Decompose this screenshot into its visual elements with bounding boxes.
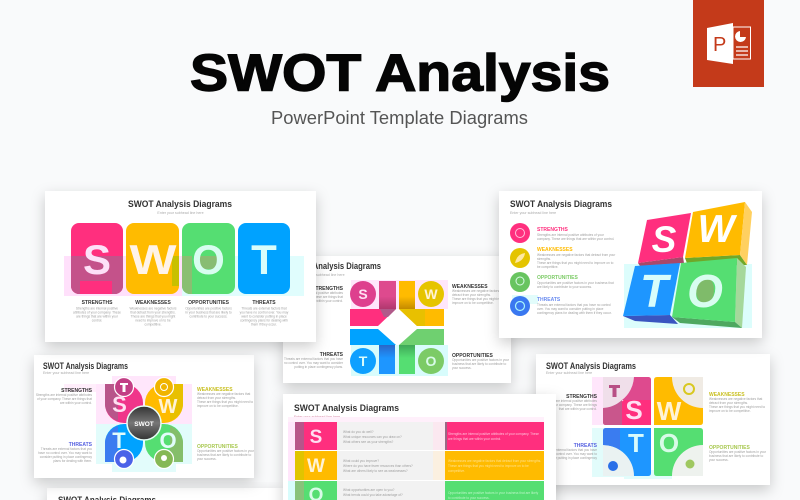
list item: strengths [510, 223, 614, 243]
slide: petal diagram: Enter your subhead line here [43, 371, 89, 375]
labels: left and right text: These are things that you might need to [197, 400, 253, 404]
row: opportunities [295, 481, 544, 500]
slide: corner tiles diagram: Enter your subhead line here [546, 371, 592, 375]
slide: partially visible bottom-left slide [47, 488, 283, 500]
list item: threats [510, 295, 612, 316]
labels: left and right text: improve on to be competitive. [197, 404, 239, 408]
block: O: O [192, 236, 225, 283]
labels: text blocks: no control over. You may want to [551, 452, 597, 456]
labels: left and right text: Strengths are internal positive attributes [36, 393, 92, 397]
list item: opportunities: Opportunities are positive factors in your business that [537, 281, 614, 285]
labels: text blocks: OPPORTUNITIES [709, 445, 751, 451]
column captions: that detract from your strengths. [130, 310, 176, 314]
slide: centered cross diagram: subhead line here [316, 273, 345, 277]
list item: weaknesses: strengths. [537, 257, 551, 261]
row: weaknesses: Where do you have fewer resources than others? [343, 464, 413, 468]
row: weaknesses: These are things that you might need to improve on to be [448, 464, 529, 468]
block: T [238, 223, 290, 294]
diagram: threats arm [350, 329, 396, 374]
row: weaknesses: What are others likely to see as weaknesses? [343, 469, 408, 473]
slide: table diagram: SWOT Analysis Diagrams [294, 403, 399, 413]
labels: left and right text: Threats are external factors that you [41, 447, 92, 451]
tile: threats [603, 428, 651, 476]
labels: text blocks: These are things that [313, 295, 343, 299]
block: T: T [251, 236, 277, 283]
labels: text blocks: no control over. You may want to consider [284, 361, 344, 365]
main title: SWOT Analysis [190, 44, 610, 102]
petal: threats [105, 424, 143, 468]
labels: left and right text [36, 384, 255, 463]
column captions: you have no control over. You may [240, 310, 289, 314]
diagram: opportunities arm: O [426, 353, 437, 369]
labels: text blocks: Strengths are internal positive attributes [541, 399, 597, 403]
column captions: contribute to your success. [190, 314, 228, 318]
column captions: control. [92, 318, 102, 322]
labels: left and right text: are within your control. [60, 401, 92, 405]
labels: text blocks: your success. [452, 366, 472, 370]
list item: strengths: company. These are things that are within your control. [537, 237, 614, 241]
labels: text blocks: Opportunities are positive factors in your [452, 358, 510, 362]
block: W: W [130, 236, 177, 283]
labels: left and right text: consider putting in place contingency [40, 455, 92, 459]
labels: left and right text: OPPORTUNITIES [197, 444, 239, 450]
row: strengths: Strengths are internal positive attributes of your company. These [448, 432, 539, 436]
block: O [182, 223, 235, 294]
labels: text blocks: These are things that you might need to [452, 297, 508, 301]
labels: text blocks: consider putting in place contingency [545, 456, 597, 460]
diagram: weaknesses arm [399, 281, 444, 326]
icon: PowerPoint badge [693, 0, 764, 87]
slide: 3D cube diagram: Enter your subhead line here [510, 211, 556, 215]
row: weaknesses: W [307, 456, 325, 477]
petal: weaknesses: W [159, 396, 178, 418]
row: strengths [295, 422, 544, 450]
column captions: attributes of your company. These [73, 310, 121, 314]
list item: weaknesses: Weaknesses are negative factors that detract from your [537, 253, 616, 257]
row: strengths: What unique resources can you draw on? [343, 435, 402, 439]
labels: left and right text: business that are likely to contribute to [197, 453, 251, 457]
list item: weaknesses: be competitive. [537, 265, 559, 269]
row: weaknesses: competitive. [448, 469, 465, 473]
labels: left and right text: of your company. These are things that [37, 397, 92, 401]
list item: weaknesses: These are things that you might need to improve on to [537, 261, 614, 265]
block: W [126, 223, 179, 294]
tile: threats: T [628, 428, 644, 458]
petal: strengths [105, 378, 143, 423]
block: S [71, 223, 123, 294]
labels: text blocks: WEAKNESSES [452, 284, 488, 290]
labels: text blocks: putting in place contingency plans. [294, 365, 343, 369]
labels: left and right text: have no control over. You may want to [38, 451, 92, 455]
labels: text blocks: OPPORTUNITIES [452, 353, 494, 359]
slide: table diagram: Enter your subhead line here [294, 415, 340, 419]
slide: centered cross diagram: SWOT Analysis Diagrams [288, 261, 381, 271]
list item: threats: contingency plans for dealing with them if they occur. [537, 311, 612, 315]
labels: left and right text: your success. [197, 457, 217, 461]
row: opportunities: What trends could you take advantage of? [343, 493, 403, 497]
center badge [127, 406, 161, 440]
row: weaknesses: Weaknesses are negative factors that detract from your strengths. [448, 459, 541, 463]
labels: text blocks: These are things that you might need to [709, 405, 765, 409]
slide: petal diagram [34, 355, 255, 478]
subtitle: PowerPoint Template Diagrams [271, 108, 528, 128]
column captions: them if they occur. [251, 322, 277, 326]
column captions: competitive. [144, 322, 162, 326]
row: strengths: What others see as your strengths? [343, 440, 394, 444]
labels: text blocks: internal positive attributes [307, 291, 343, 295]
labels: text blocks: Weaknesses are negative factors that [709, 397, 762, 401]
slide: 3D cube diagram [499, 191, 762, 338]
labels: text blocks: improve on to be competitive. [709, 409, 751, 413]
slide: corner tiles diagram: SWOT Analysis Diagrams [546, 361, 636, 371]
3D cubes: T [640, 265, 672, 317]
tile: opportunities: O [659, 428, 679, 458]
column captions: want to consider putting in place [241, 314, 287, 318]
row: strengths: are things that are within your control. [448, 437, 501, 441]
column captions: contingency plans for dealing with [240, 318, 288, 322]
labels: text blocks: of your company. These are things [548, 403, 597, 407]
row: opportunities: What opportunities are open to you? [343, 488, 395, 492]
list item: weaknesses [510, 247, 616, 269]
tile: weaknesses: W [657, 396, 682, 426]
3D cubes: S [652, 219, 677, 260]
labels: text blocks [538, 392, 767, 462]
labels: text blocks: business that are likely to contribute to [709, 454, 763, 458]
list item: opportunities: are likely to contribute to your success. [537, 285, 592, 289]
list item: strengths: Strengths are internal positive attributes of your [537, 233, 605, 237]
column captions: need to improve on to be [135, 318, 171, 322]
column captions: Weaknesses are negative factors [129, 306, 177, 310]
list item: opportunities [510, 272, 614, 292]
slide: table diagram [283, 394, 556, 500]
column captions: Opportunities are positive factors [185, 306, 232, 310]
labels: text blocks: business that are likely to contribute to [452, 362, 506, 366]
labels: left and right text: STRENGTHS [61, 388, 93, 394]
labels: left and right text: detract from your strengths. [197, 396, 236, 400]
diagram: threats arm: T [359, 353, 368, 369]
labels: left and right text: WEAKNESSES [197, 387, 233, 393]
row: weaknesses [295, 451, 544, 480]
labels: text blocks: detract from your strengths. [709, 401, 748, 405]
row: opportunities: Opportunities are positive factors in your business that are likely [448, 491, 539, 495]
labels: text blocks: detract from your strengths. [452, 293, 491, 297]
slide: petal diagram: SWOT Analysis Diagrams [43, 361, 128, 371]
labels: left and right text: THREATS [69, 442, 93, 448]
slide: SWOT letter blocks: Enter your subhead line here [157, 211, 204, 215]
3D cubes: O [687, 265, 723, 317]
list item: threats: over. You may want to consider putting in place [537, 307, 604, 311]
column captions [73, 300, 289, 326]
labels: left and right text: Opportunities are positive factors in your [197, 449, 255, 453]
column captions: in your business that are likely to [185, 310, 232, 314]
list item: opportunities: OPPORTUNITIES [537, 275, 579, 281]
3D cubes: W [698, 208, 738, 251]
slide: SWOT letter blocks: SWOT Analysis Diagrams [128, 199, 232, 209]
labels: text blocks: STRENGTHS [312, 286, 344, 292]
diagram: weaknesses arm: W [424, 286, 438, 302]
block: S: S [83, 236, 111, 283]
labels: text blocks: that are within your control. [559, 407, 597, 411]
row: strengths: What do you do well? [343, 430, 374, 434]
labels: text blocks: Opportunities are positive factors in your [709, 450, 767, 454]
list item: threats: THREATS [537, 297, 561, 303]
slide: centered cross diagram [283, 256, 511, 383]
tile: strengths: S [625, 395, 643, 425]
center badge: SWOT [134, 421, 154, 428]
labels: text blocks: are within your control. [311, 299, 343, 303]
tile: weaknesses [654, 377, 703, 426]
3D cubes [623, 202, 752, 328]
labels: text blocks [284, 284, 510, 370]
column captions: WEAKNESSES [135, 300, 171, 306]
row: strengths: S [310, 427, 322, 448]
tile: opportunities [654, 428, 703, 476]
diagram: strengths arm: S [358, 286, 368, 302]
petal: strengths: S [112, 392, 127, 417]
diagram: opportunities arm [399, 329, 444, 374]
labels: text blocks: THREATS [320, 352, 344, 358]
diagram: strengths arm [350, 281, 396, 326]
petal: weaknesses [145, 378, 183, 423]
labels: text blocks: WEAKNESSES [709, 392, 745, 398]
labels: text blocks: Threats are external factors that you have [284, 357, 343, 361]
column captions: OPPORTUNITIES [188, 300, 230, 306]
column captions: Strengths are internal positive [76, 306, 118, 310]
list item: weaknesses: WEAKNESSES [537, 247, 573, 253]
column captions: These are things that you might [131, 314, 175, 318]
petal: threats: T [112, 428, 126, 453]
row: opportunities: to contribute to your success. [448, 496, 490, 500]
column captions: THREATS [252, 300, 276, 306]
labels: text blocks: Weaknesses are negative factors that [452, 289, 505, 293]
labels: text blocks: Threats are external factors that you have [538, 448, 597, 452]
labels: text blocks: improve on to be competitive. [452, 301, 494, 305]
tile: strengths [603, 377, 651, 425]
slide: corner tiles diagram [536, 354, 770, 485]
list item: threats: Threats are external factors that you have no control [537, 303, 611, 307]
labels: text blocks: your success. [709, 458, 729, 462]
slide: 3D cube diagram: SWOT Analysis Diagrams [510, 199, 612, 209]
column captions: are things that are within your [76, 314, 119, 318]
labels: left and right text: plans for dealing with them. [53, 459, 92, 463]
labels: text blocks: STRENGTHS [566, 394, 598, 400]
column captions: STRENGTHS [82, 300, 113, 306]
labels: left and right text: Weaknesses are negative factors that [197, 392, 250, 396]
icon: PowerPoint badge: P [713, 34, 726, 56]
petal: opportunities: O [159, 428, 177, 453]
list item: strengths: STRENGTHS [537, 227, 568, 233]
slide: SWOT letter blocks [45, 191, 316, 342]
petal: opportunities [145, 424, 183, 468]
column captions: Threats are external factors that [241, 306, 287, 310]
labels: text blocks: THREATS [574, 443, 598, 449]
row: weaknesses: What could you improve? [343, 459, 379, 463]
